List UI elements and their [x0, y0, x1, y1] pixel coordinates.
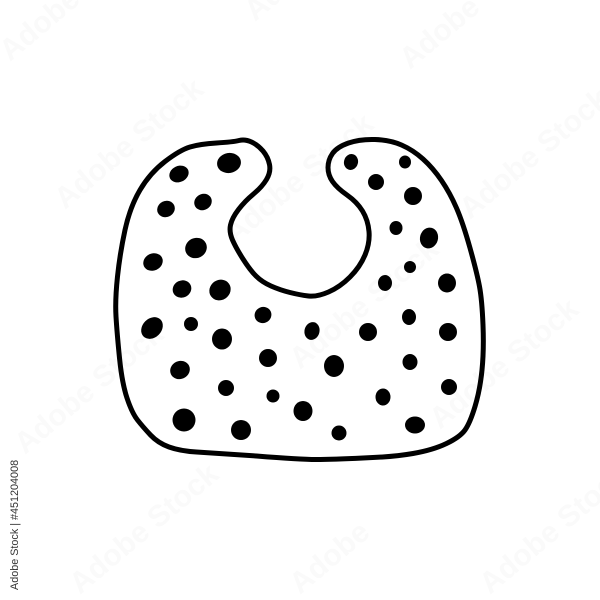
watermark pattern: Adobe Stock	[63, 457, 225, 600]
watermark pattern: Adobe	[283, 515, 376, 600]
polka dots	[137, 151, 457, 440]
bib outline	[116, 139, 483, 459]
bib illustration	[116, 139, 483, 459]
stock id caption: Adobe Stock | #451204008	[9, 460, 21, 590]
watermark pattern: Adobe Stock	[283, 232, 445, 375]
watermark pattern: Adobe Stock	[48, 72, 210, 215]
watermark pattern: Adobe Stock	[423, 292, 585, 435]
watermark pattern: Adobe Stock	[218, 107, 380, 250]
watermark pattern: Adobe Stock	[8, 317, 170, 460]
